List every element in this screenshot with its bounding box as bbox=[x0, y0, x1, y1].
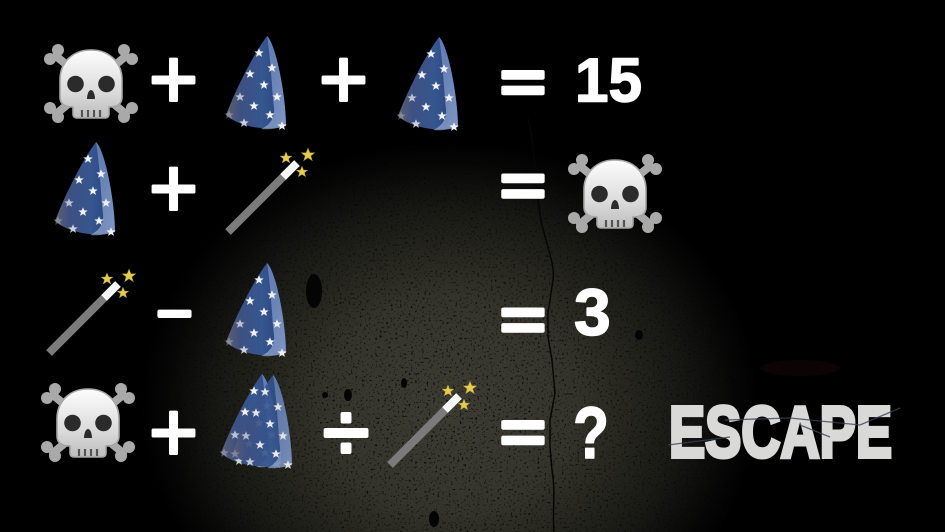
icon: wizard hat bbox=[53, 142, 116, 236]
icon: skull bbox=[44, 44, 138, 123]
icon: two wizard hats bbox=[219, 374, 293, 469]
result 3: 3 bbox=[574, 275, 611, 349]
plus: + bbox=[319, 32, 368, 126]
result 15: 15 bbox=[575, 46, 642, 116]
icon: skull bbox=[568, 154, 662, 233]
equals: = bbox=[500, 288, 546, 352]
row 2: equation hat + wand = skull bbox=[53, 141, 662, 236]
plus: + bbox=[149, 32, 198, 126]
icon: magic wand bbox=[49, 269, 136, 353]
row 1: equation skull + hat + hat = 15 bbox=[44, 32, 642, 131]
icon: wizard hat bbox=[224, 263, 287, 357]
divide: ÷ bbox=[323, 385, 369, 479]
result question mark: ? bbox=[573, 393, 609, 474]
equals: = bbox=[500, 400, 546, 464]
equals: = bbox=[500, 154, 546, 218]
background: dark concrete wall bbox=[172, 167, 840, 532]
plus: + bbox=[149, 141, 198, 235]
icon: wizard hat bbox=[224, 36, 287, 130]
icon: skull bbox=[41, 383, 135, 462]
row 4: equation skull + hats ÷ wand = ? bbox=[41, 374, 609, 479]
equals: = bbox=[500, 50, 546, 114]
plus: + bbox=[149, 385, 198, 479]
icon: magic wand bbox=[228, 148, 315, 232]
icon: magic wand bbox=[390, 381, 477, 465]
crack bbox=[528, 118, 555, 532]
icon: wizard hat bbox=[396, 37, 459, 131]
minus: − bbox=[156, 280, 193, 348]
row 3: equation wand - hat = 3 bbox=[49, 263, 611, 357]
